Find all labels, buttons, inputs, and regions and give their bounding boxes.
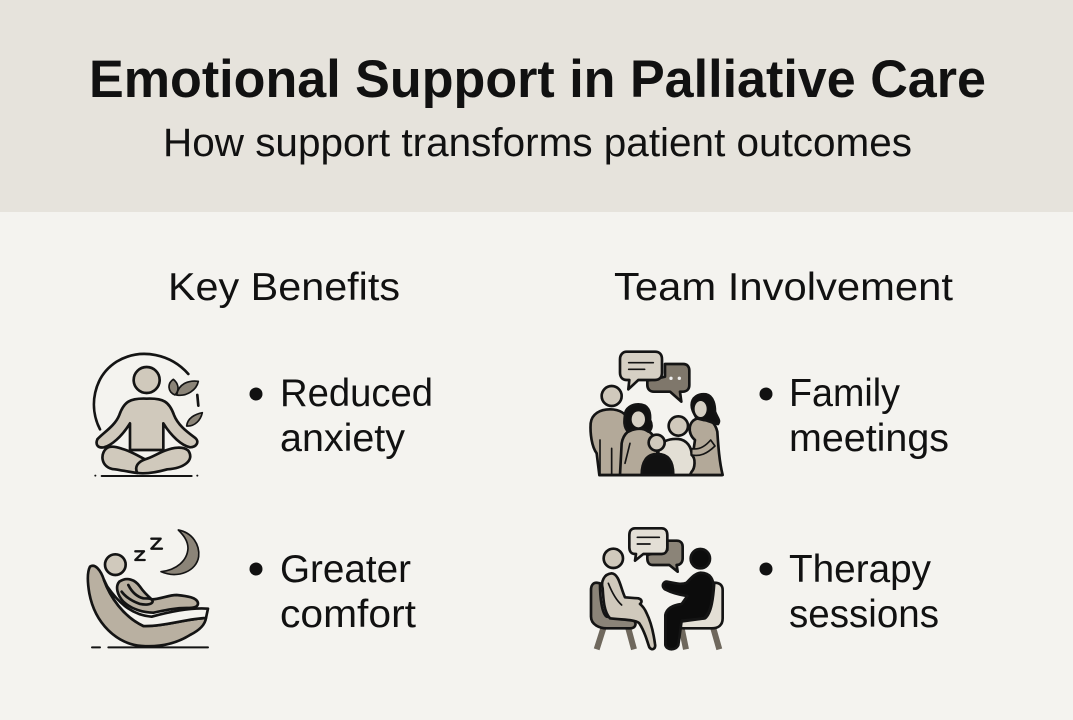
bullet: greater comfort: Greater [280, 548, 411, 591]
heading: team involvement: Team Involvement [614, 266, 953, 309]
bullet: reduced anxiety: Reduced [280, 372, 433, 415]
bullet: therapy sessions: Therapy [789, 548, 931, 591]
bullet: family meetings [760, 372, 949, 460]
bullet: greater comfort [250, 548, 416, 636]
header band [0, 0, 1073, 212]
subtitle: How support transforms patient outcomes [163, 121, 912, 165]
bullet: reduced anxiety [250, 372, 433, 460]
panel: key benefits [88, 266, 433, 647]
icon: family meeting [591, 352, 723, 475]
bullet: greater comfort: comfort [280, 593, 416, 636]
bullet: reduced anxiety: anxiety [280, 417, 405, 460]
bullet: family meetings: meetings [789, 417, 949, 460]
title: Emotional Support in Palliative Care [89, 50, 986, 109]
bullet: therapy sessions: sessions [789, 593, 939, 636]
panel: team involvement [591, 266, 953, 649]
heading: key benefits: Key Benefits [168, 266, 400, 309]
bullet: family meetings: Family [789, 372, 900, 415]
icon: meditating person with leaves [94, 354, 202, 477]
icon: reclining person with moon [88, 530, 208, 647]
bullet: therapy sessions [760, 548, 939, 636]
icon: therapy session [591, 528, 723, 649]
